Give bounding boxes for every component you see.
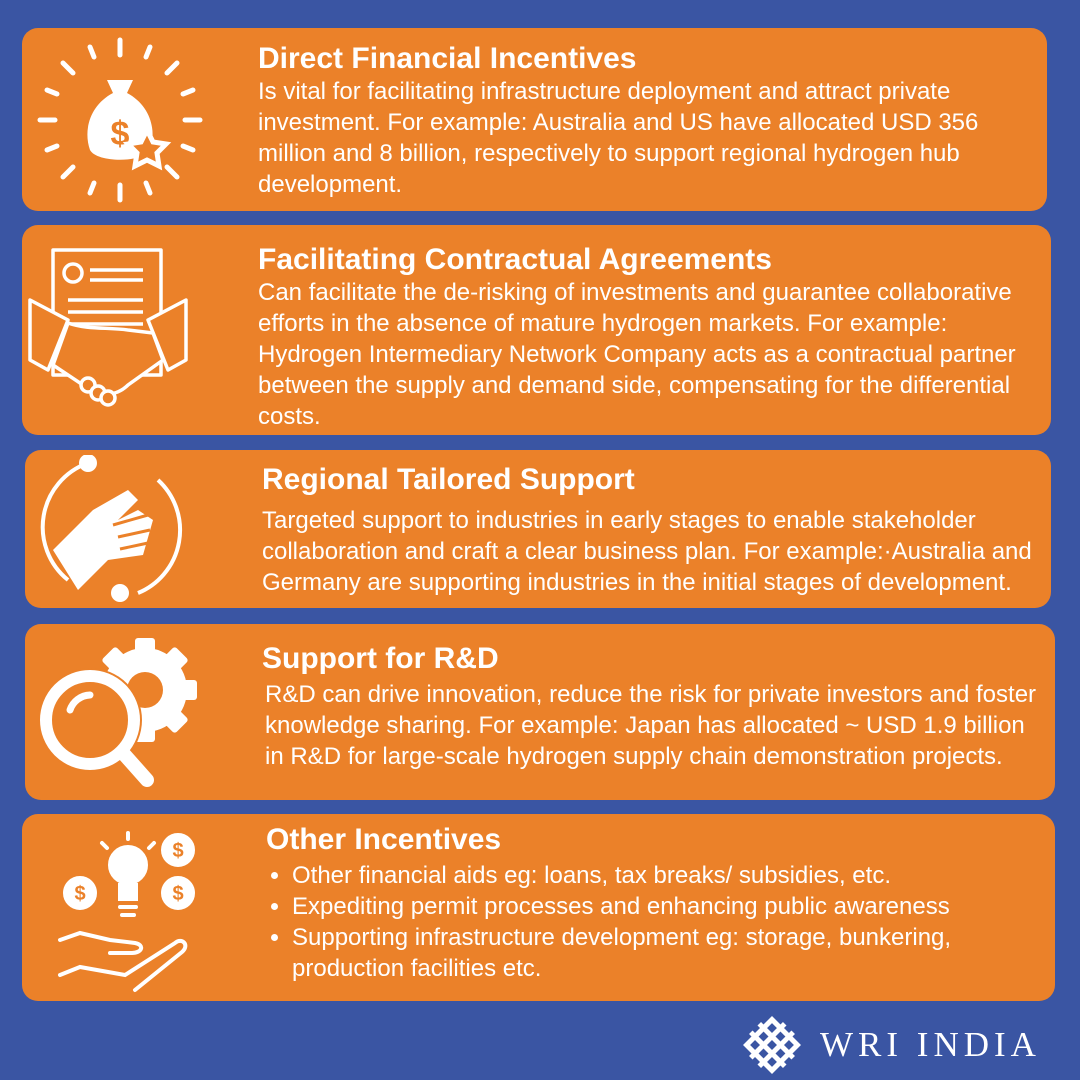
icon: helping hands circle — [40, 455, 182, 602]
body 2: efforts in the absence of mature hydrogen markets. For example: — [258, 310, 947, 337]
body 2 — [258, 279, 1016, 430]
body 3 — [262, 507, 1032, 596]
panel: other incentives — [22, 814, 1055, 1001]
body 2: costs. — [258, 403, 321, 430]
body 2: between the supply and demand side, compensating for the differential — [258, 372, 1010, 399]
bullets 5: production facilities etc. — [292, 955, 541, 982]
body 3: collaboration and craft a clear business plan. For example:·Australia and — [262, 538, 1032, 565]
body 3: Targeted support to industries in early stages to enable stakeholder — [262, 507, 976, 534]
title 1: Direct Financial Incentives — [258, 42, 636, 75]
body 2: Hydrogen Intermediary Network Company acts as a contractual partner — [258, 341, 1016, 368]
icon: contract handshake — [28, 248, 188, 407]
icon: bulb coins hand: $ — [172, 883, 184, 905]
icon: bulb coins hand: $ — [74, 883, 86, 905]
body 4 — [265, 681, 1036, 770]
bullets 5: Other financial aids eg: loans, tax breaks/ subsidies, etc. — [292, 862, 891, 889]
body 3: Germany are supporting industries in the initial stages of development. — [262, 569, 1012, 596]
icon: money bag with rays — [38, 38, 202, 202]
bullets 5: Supporting infrastructure development eg: storage, bunkering, — [292, 924, 951, 951]
body 1: development. — [258, 171, 402, 198]
body 1: Is vital for facilitating infrastructure deployment and attract private — [258, 78, 950, 105]
panel: contractual agreements — [22, 225, 1051, 435]
icon: bulb coins hand: $ — [172, 840, 184, 862]
icon: bulb coins hand — [58, 831, 195, 992]
bullets 5 — [271, 862, 951, 982]
body 4: R&D can drive innovation, reduce the risk for private investors and foster — [265, 681, 1036, 708]
title 2: Facilitating Contractual Agreements — [258, 243, 772, 276]
logo: WRI India — [743, 1016, 1041, 1074]
title 5: Other Incentives — [266, 823, 501, 856]
bullets 5: Expediting permit processes and enhancing public awareness — [292, 893, 950, 920]
icon: magnifier and gear — [40, 638, 197, 787]
icon: money bag with rays: $ — [111, 115, 130, 153]
body 1: million and 8 billion, respectively to support regional hydrogen hub — [258, 140, 960, 167]
title 4: Support for R&D — [262, 642, 499, 675]
body 4: in R&D for large-scale hydrogen supply chain demonstration projects. — [265, 743, 1003, 770]
body 1 — [258, 78, 978, 198]
body 1: investment. For example: Australia and US have allocated USD 356 — [258, 109, 978, 136]
panel: R&D — [25, 624, 1055, 800]
title 3: Regional Tailored Support — [262, 463, 635, 496]
body 4: knowledge sharing. For example: Japan has allocated ~ USD 1.9 billion — [265, 712, 1025, 739]
body 2: Can facilitate the de-risking of investments and guarantee collaborative — [258, 279, 1012, 306]
logo: WRI India: WRI INDIA — [820, 1025, 1041, 1064]
panel: direct financial incentives — [22, 28, 1047, 211]
panel: regional tailored support — [25, 450, 1051, 608]
